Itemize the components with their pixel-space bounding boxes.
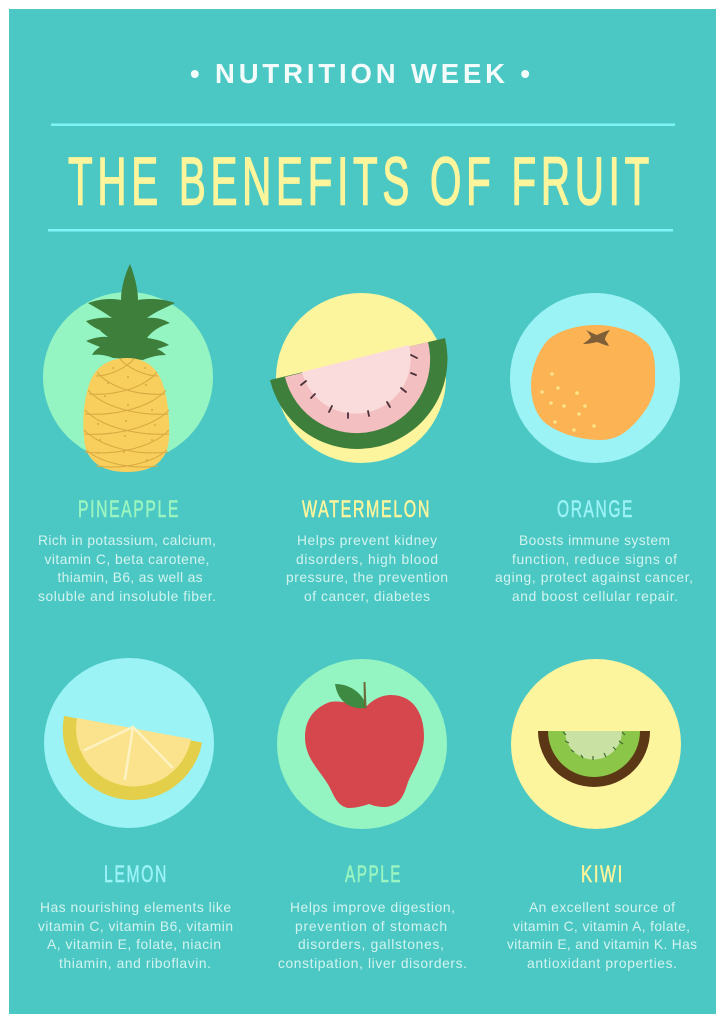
icon: apple (277, 659, 447, 829)
icon: pineapple (43, 264, 213, 472)
text: watermelon benefits: disorders, high blood (296, 552, 438, 567)
text: apple benefits (278, 900, 467, 971)
text: watermelon benefits: Helps prevent kidney (297, 533, 437, 548)
icon: kiwi (511, 659, 681, 829)
text: apple benefits: disorders, gallstones, (298, 937, 444, 952)
text: watermelon benefits: of cancer, diabetes (304, 589, 430, 604)
text: kiwi benefits: antioxidant properties. (527, 956, 677, 971)
eyebrow: nutrition week: • NUTRITION WEEK • (190, 58, 530, 89)
text: kiwi benefits: vitamin C, vitamin A, folate, (513, 919, 690, 934)
text: watermelon benefits (286, 533, 448, 604)
text: lemon benefits: A, vitamin E, folate, niacin (47, 937, 221, 952)
text: lemon benefits: thiamin, and riboflavin. (59, 956, 211, 971)
text: kiwi benefits (507, 900, 697, 971)
panel: kiwi (507, 659, 697, 971)
text: pineapple benefits (38, 533, 216, 604)
heading: pineapple: PINEAPPLE (78, 496, 180, 523)
text: orange benefits: function, reduce signs of (512, 552, 677, 567)
heading: orange: ORANGE (557, 496, 634, 523)
text: watermelon benefits: pressure, the prevention (286, 570, 448, 585)
text: orange benefits: Boosts immune system (519, 533, 670, 548)
panel: lemon (38, 658, 233, 971)
icon: lemon (44, 658, 214, 828)
text: apple benefits: prevention of stomach (295, 919, 447, 934)
icon: watermelon (270, 293, 447, 463)
text: kiwi benefits: vitamin E, and vitamin K. Has (507, 937, 697, 952)
heading: lemon: LEMON (104, 861, 168, 888)
text: lemon benefits: Has nourishing elements like (40, 900, 231, 915)
text: lemon benefits (38, 900, 233, 971)
text: orange benefits: aging, protect against cancer, (495, 570, 693, 585)
heading: watermelon: WATERMELON (302, 496, 431, 523)
text: lemon benefits: vitamin C, vitamin B6, vitamin (38, 919, 233, 934)
text: kiwi benefits: An excellent source of (529, 900, 675, 915)
panel: apple (277, 659, 467, 971)
text: orange benefits: and boost cellular repair. (512, 589, 678, 604)
icon: orange (510, 293, 680, 463)
text: pineapple benefits: soluble and insoluble fiber. (38, 589, 216, 604)
text: pineapple benefits: thiamin, B6, as well as (58, 570, 203, 585)
text: pineapple benefits: vitamin C, beta carotene, (44, 552, 210, 567)
text: apple benefits: constipation, liver disorders. (278, 956, 467, 971)
text: apple benefits: Helps improve digestion, (290, 900, 455, 915)
panel: pineapple (38, 264, 216, 604)
heading: kiwi: KIWI (581, 861, 624, 888)
panel: watermelon (270, 293, 448, 604)
panel: orange (495, 293, 693, 604)
text: pineapple benefits: Rich in potassium, calcium, (38, 533, 216, 548)
heading: apple: APPLE (345, 861, 402, 888)
text: orange benefits (495, 533, 693, 604)
